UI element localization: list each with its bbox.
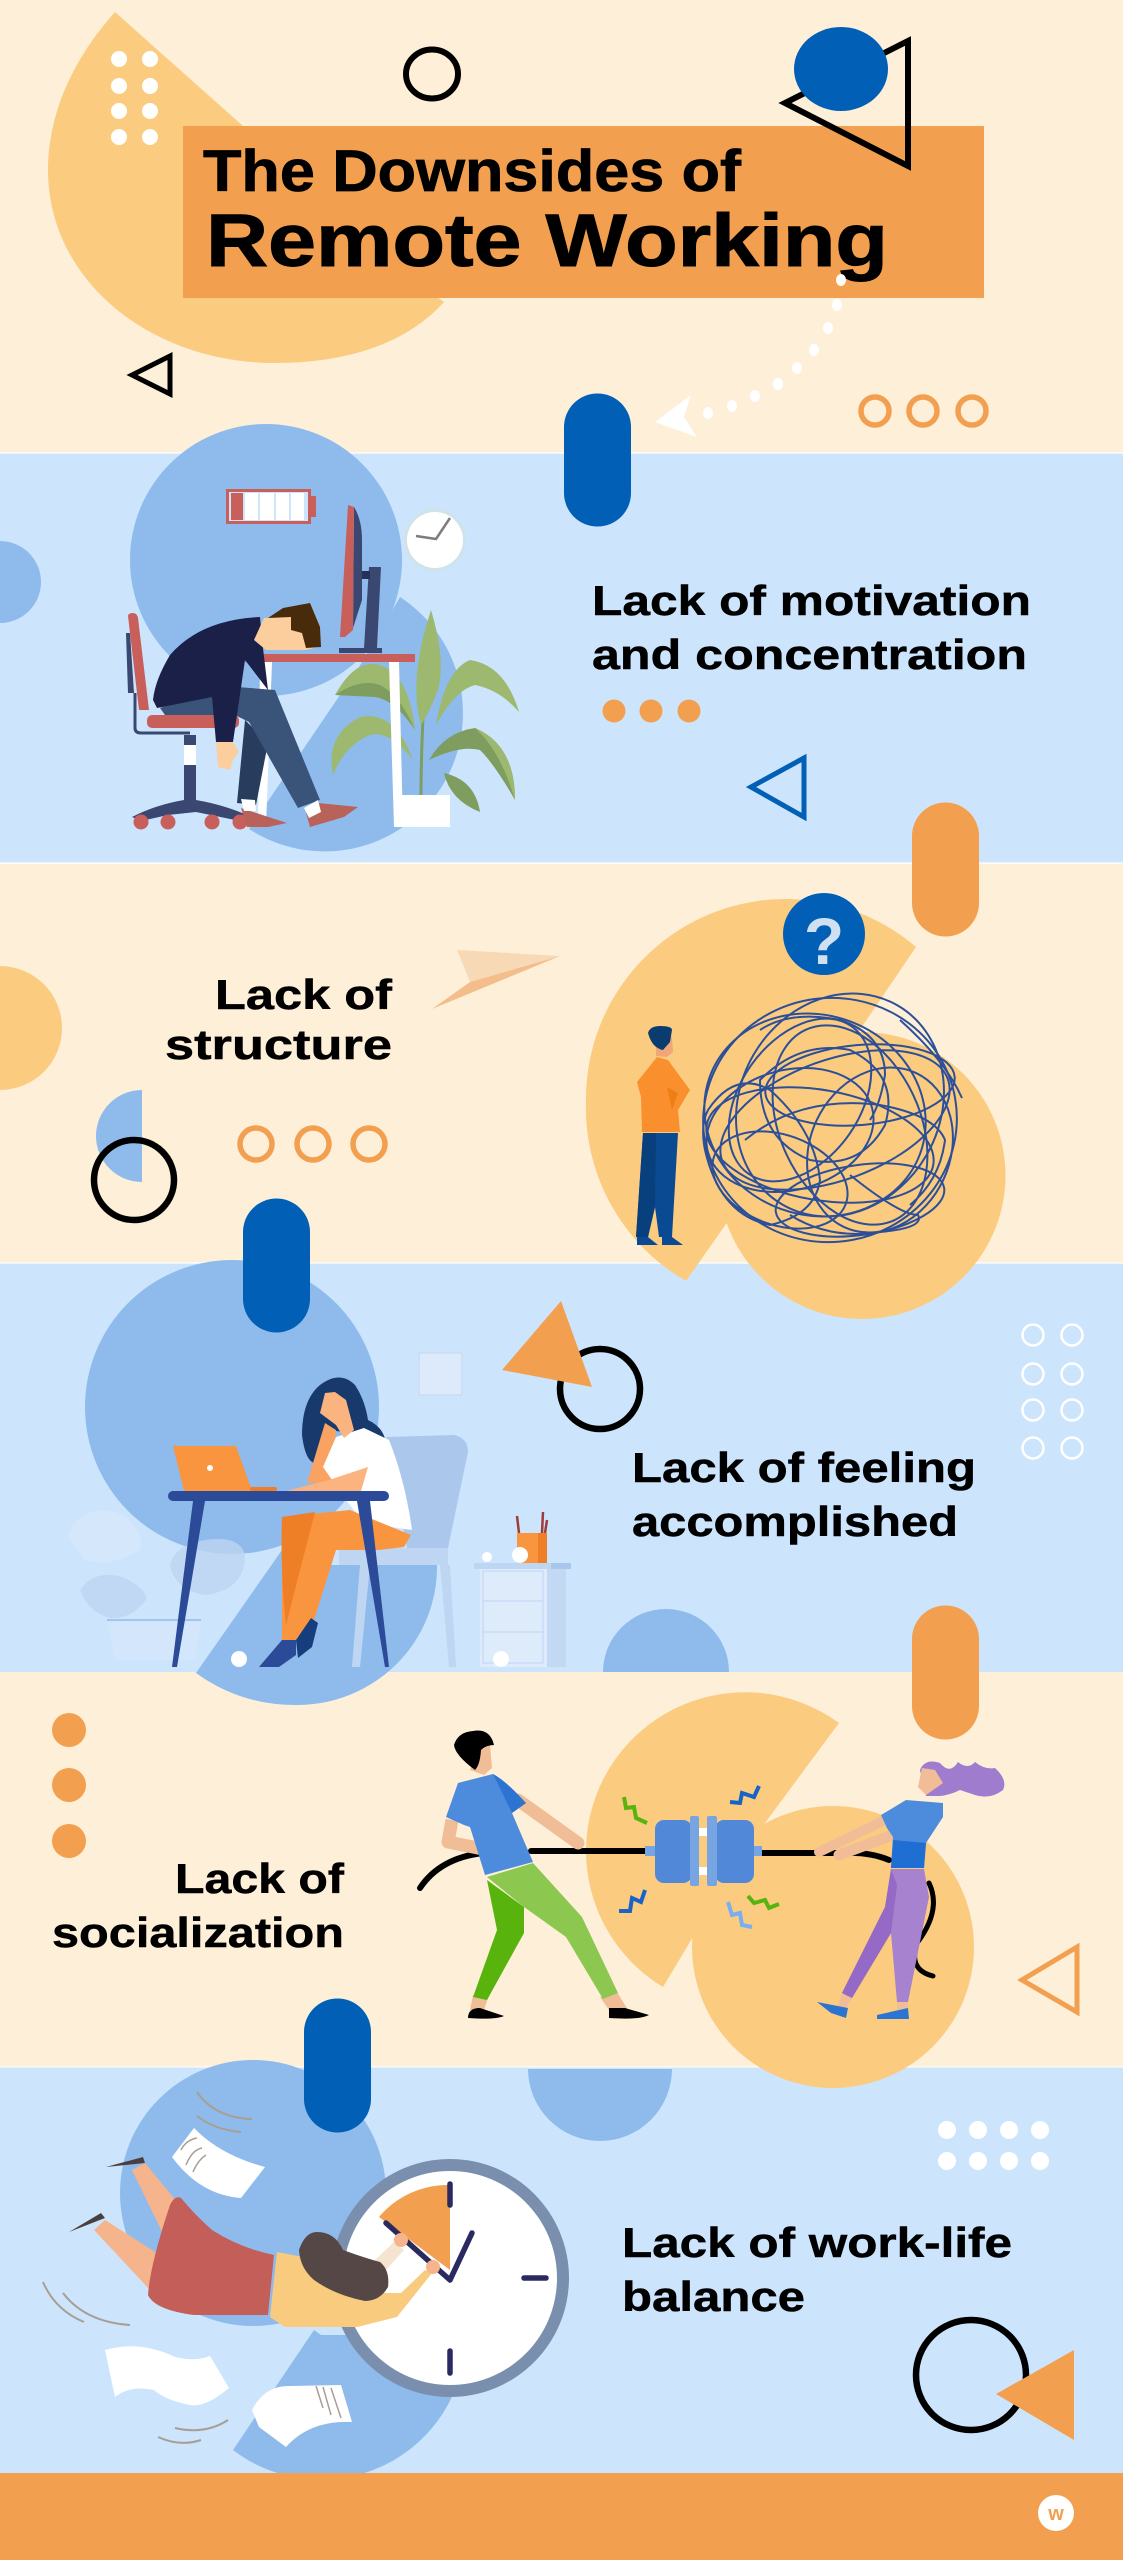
black ring bbox=[916, 2320, 1026, 2430]
computer monitor bbox=[339, 505, 382, 653]
potted plant bbox=[332, 610, 519, 827]
small black triangle bbox=[132, 356, 170, 394]
orange triangle bbox=[502, 1301, 592, 1387]
backdrop shapes bbox=[120, 2060, 672, 2480]
dotted white arrow bbox=[655, 274, 846, 437]
sleeping man bbox=[147, 603, 358, 827]
faded plant bbox=[68, 1511, 245, 1660]
flying papers bbox=[105, 2128, 352, 2447]
panel: lack of work-life balance bbox=[43, 1998, 1074, 2480]
heading: Lack of motivation bbox=[592, 577, 1031, 624]
faded drawers bbox=[474, 1563, 571, 1667]
black outlined triangle bbox=[785, 41, 908, 166]
icon: plug bbox=[645, 1816, 762, 1886]
tangled scribble bbox=[676, 955, 984, 1262]
title background bbox=[183, 126, 984, 298]
heading bbox=[632, 1444, 976, 1545]
footer bar bbox=[0, 2473, 1123, 2560]
blue outlined triangle bbox=[751, 758, 804, 817]
orange rings bbox=[240, 1128, 385, 1160]
title bbox=[203, 139, 888, 282]
heading: and concentration bbox=[592, 631, 1027, 678]
panel: lack of socialization bbox=[52, 1606, 1077, 2088]
backdrop shapes bbox=[586, 1692, 974, 2088]
icon: logo: w bbox=[1047, 2503, 1064, 2525]
backdrop shapes bbox=[85, 1260, 729, 1705]
heading: Lack of bbox=[215, 971, 393, 1018]
heading: balance bbox=[622, 2273, 805, 2320]
orange dots bbox=[52, 1713, 86, 1858]
blue half circle bbox=[96, 1090, 142, 1182]
desk bbox=[168, 1491, 389, 1667]
title: Remote Working bbox=[206, 199, 888, 282]
pencil cup bbox=[517, 1512, 547, 1563]
motion lines bbox=[43, 2092, 252, 2443]
icon: wall clock bbox=[404, 509, 466, 571]
black ring bbox=[94, 1140, 174, 1220]
orange pill bbox=[912, 802, 979, 936]
orange rings bbox=[861, 397, 986, 425]
backdrop shapes bbox=[586, 899, 1006, 1319]
orange half circle bbox=[0, 966, 62, 1090]
orange pill bbox=[912, 1606, 979, 1740]
man pulling cable bbox=[446, 1731, 649, 2019]
blue pill bbox=[304, 1998, 371, 2132]
heading bbox=[52, 1855, 345, 1956]
orange triangle bbox=[996, 2350, 1074, 2440]
large clock bbox=[331, 2159, 569, 2397]
laptop bbox=[173, 1446, 277, 1491]
heading: structure bbox=[165, 1021, 392, 1068]
faded wall clock bbox=[419, 1353, 462, 1395]
standing person bbox=[636, 1026, 690, 1245]
white dot grid bbox=[938, 2121, 1049, 2170]
heading bbox=[165, 971, 393, 1068]
faded chair bbox=[339, 1435, 468, 1667]
header pacman shape bbox=[48, 12, 444, 363]
falling woman bbox=[69, 2157, 440, 2327]
blue ellipse bbox=[794, 27, 888, 111]
panel: lack of motivation bbox=[0, 394, 1031, 851]
heading: Lack of work-life bbox=[622, 2219, 1012, 2266]
paper balls bbox=[231, 1547, 528, 1667]
desk bbox=[245, 654, 415, 827]
icon: logo bbox=[1038, 2495, 1074, 2531]
black ring bbox=[560, 1349, 640, 1429]
black ring bbox=[406, 50, 458, 98]
blue pill bbox=[564, 394, 631, 526]
title: The Downsides of bbox=[203, 139, 742, 204]
icon: question bubble: ? bbox=[804, 904, 844, 978]
woman at desk bbox=[259, 1378, 412, 1667]
heading bbox=[622, 2219, 1012, 2320]
heading bbox=[592, 577, 1031, 678]
panel: lack of structure bbox=[0, 802, 1006, 1319]
blue pill bbox=[243, 1199, 310, 1332]
orange dots bbox=[602, 700, 700, 722]
woman pulling cable bbox=[817, 1762, 1004, 2019]
panel: lack of feeling accomplished bbox=[68, 1199, 1082, 1705]
cable bbox=[420, 1851, 933, 1976]
backdrop blobs bbox=[0, 424, 463, 851]
icon: question bubble bbox=[783, 893, 865, 978]
heading: socialization bbox=[52, 1909, 344, 1956]
heading: accomplished bbox=[632, 1498, 958, 1545]
icon: paper plane bbox=[432, 950, 560, 1009]
icon: battery bbox=[226, 489, 316, 524]
office chair bbox=[126, 613, 249, 830]
sparks bbox=[619, 1786, 779, 1927]
heading: Lack of bbox=[175, 1855, 345, 1902]
white rings bbox=[1022, 1324, 1082, 1458]
orange outlined triangle bbox=[1022, 1947, 1077, 2012]
heading: Lack of feeling bbox=[632, 1444, 976, 1491]
white dot grid bbox=[111, 51, 158, 145]
panel: header bbox=[48, 12, 986, 437]
